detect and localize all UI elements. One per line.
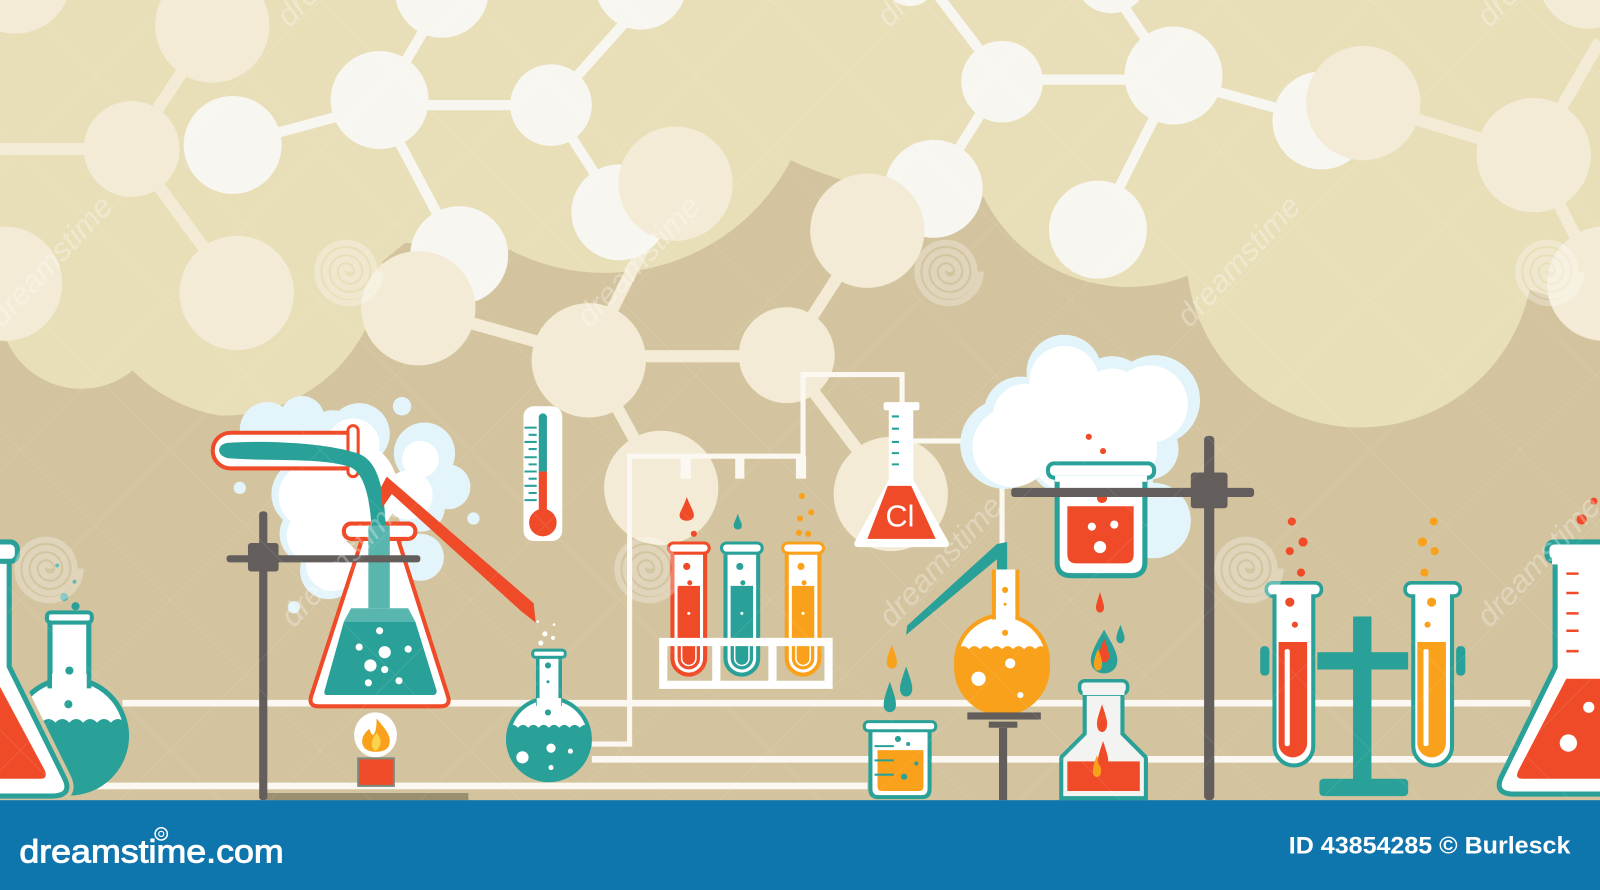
footer bar [0, 800, 1600, 890]
teal test tube in rack [721, 513, 762, 675]
red delivery tube [381, 477, 536, 623]
watermark overlay: dreamstime [569, 188, 708, 333]
conical flask: red, left edge [0, 542, 67, 796]
lab bench lines and pipes [61, 375, 1531, 786]
large conical flask with teal liquid [311, 524, 449, 706]
candle flask with flame drops [1061, 592, 1146, 798]
small beaker with orange liquid [864, 722, 936, 797]
round flask: orange [954, 570, 1050, 716]
right beaker with red liquid [1048, 434, 1154, 576]
round flask: teal, bottom [506, 620, 592, 782]
watermark overlay: dreamstime [1169, 188, 1308, 333]
background clouds [0, 0, 1600, 427]
conical flask labelled Cl: Cl [886, 500, 914, 534]
footer logo: dreamstime.com: dreamstime.com [19, 832, 284, 869]
pouring test tube [213, 426, 386, 526]
red test tube in rack [668, 497, 709, 675]
watermark overlay: dreamstime [273, 488, 412, 633]
watermark overlay: dreamstime [871, 488, 1010, 633]
bench base shadow [266, 793, 468, 800]
teal delivery arm [906, 542, 1007, 635]
footer credit: ID 43854285 © Burlesck [1289, 832, 1571, 859]
teal cross stand [1260, 616, 1465, 796]
conical flask labelled Cl [854, 402, 949, 547]
thermometer [523, 406, 562, 541]
round flask: teal, left [12, 563, 127, 793]
molecule structure [0, 0, 1600, 551]
red test tube, right [1266, 517, 1321, 765]
orange test tube in rack [783, 493, 823, 675]
orange flask stand [967, 712, 1041, 800]
steam cloud: right beaker [960, 335, 1200, 558]
falling drops [884, 645, 912, 712]
right ring stand [1011, 436, 1254, 800]
steam cloud: centre flask [234, 396, 480, 613]
orange test tube, right [1405, 517, 1460, 765]
spirit burner [354, 712, 397, 786]
conical flask: red, right edge [1499, 498, 1600, 794]
left ring stand [227, 511, 420, 800]
test tube rack [663, 642, 829, 685]
